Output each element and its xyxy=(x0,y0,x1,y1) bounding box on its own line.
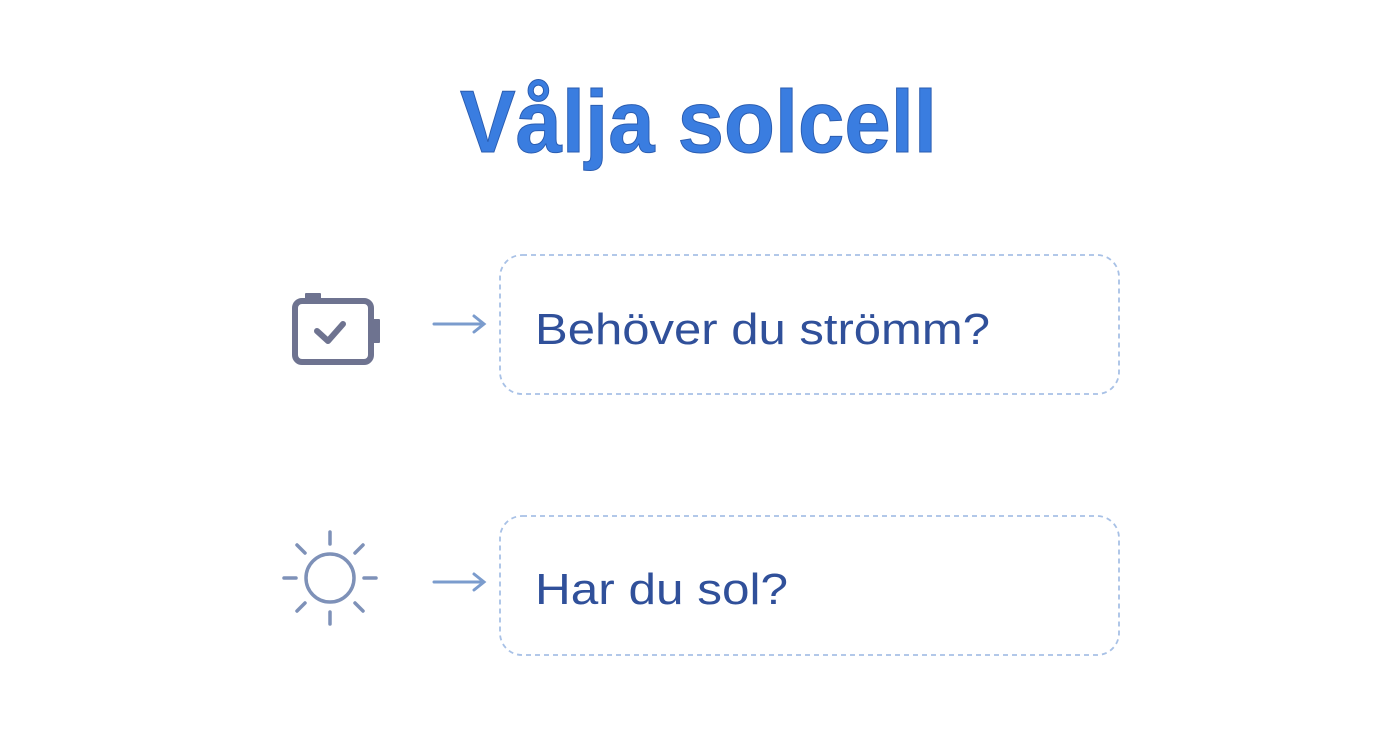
arrow 1 xyxy=(434,316,484,332)
panel: question 1 xyxy=(500,255,1119,394)
arrow 2 xyxy=(434,574,484,590)
panel: question 2 xyxy=(500,516,1119,655)
title: Vålja solcell xyxy=(460,72,937,171)
icon: battery with check xyxy=(295,294,379,362)
icon: sun xyxy=(284,532,376,624)
text: question 2: Har du sol? xyxy=(535,565,788,614)
text: question 1: Behöver du strömm? xyxy=(535,305,990,354)
